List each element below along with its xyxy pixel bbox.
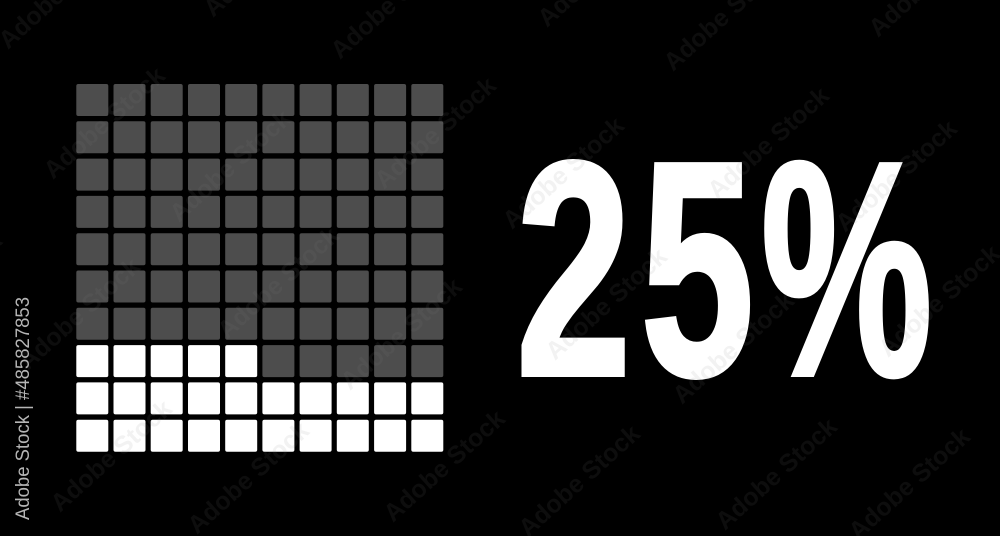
waffle chart: 25 of 100 cells filled xyxy=(76,84,443,452)
watermark pattern: Adobe Stock xyxy=(212,221,345,344)
watermark pattern: Adobe Stock xyxy=(38,61,171,184)
watermark pattern: Adobe Stock xyxy=(710,412,843,535)
watermark pattern: Adobe Stock xyxy=(702,81,835,204)
watermark pattern: Adobe Stock xyxy=(13,252,146,375)
big percentage figure: 2 xyxy=(516,100,631,440)
watermark pattern: Adobe Stock xyxy=(164,104,297,227)
watermark pattern: Adobe Stock xyxy=(830,114,963,237)
watermark pattern: Adobe Stock xyxy=(369,71,502,194)
white filled cells xyxy=(76,345,443,452)
watermark pattern: Adobe Stock xyxy=(378,404,511,527)
side credit label: Adobe Stock | #485827853 xyxy=(13,297,34,520)
watermark pattern: Adobe Stock xyxy=(45,394,178,517)
watermark pattern: Adobe Stock xyxy=(497,111,630,234)
big percentage figure: 5 xyxy=(641,98,754,439)
watermark pattern: Adobe Stock xyxy=(335,272,468,395)
watermark pattern: Adobe Stock xyxy=(540,242,673,365)
grey unfilled cells xyxy=(76,84,443,377)
watermark pattern: Adobe Stock xyxy=(182,416,315,536)
big percentage figure xyxy=(516,98,932,440)
watermark pattern: Adobe Stock xyxy=(667,286,800,409)
big percentage figure: % xyxy=(761,100,932,440)
